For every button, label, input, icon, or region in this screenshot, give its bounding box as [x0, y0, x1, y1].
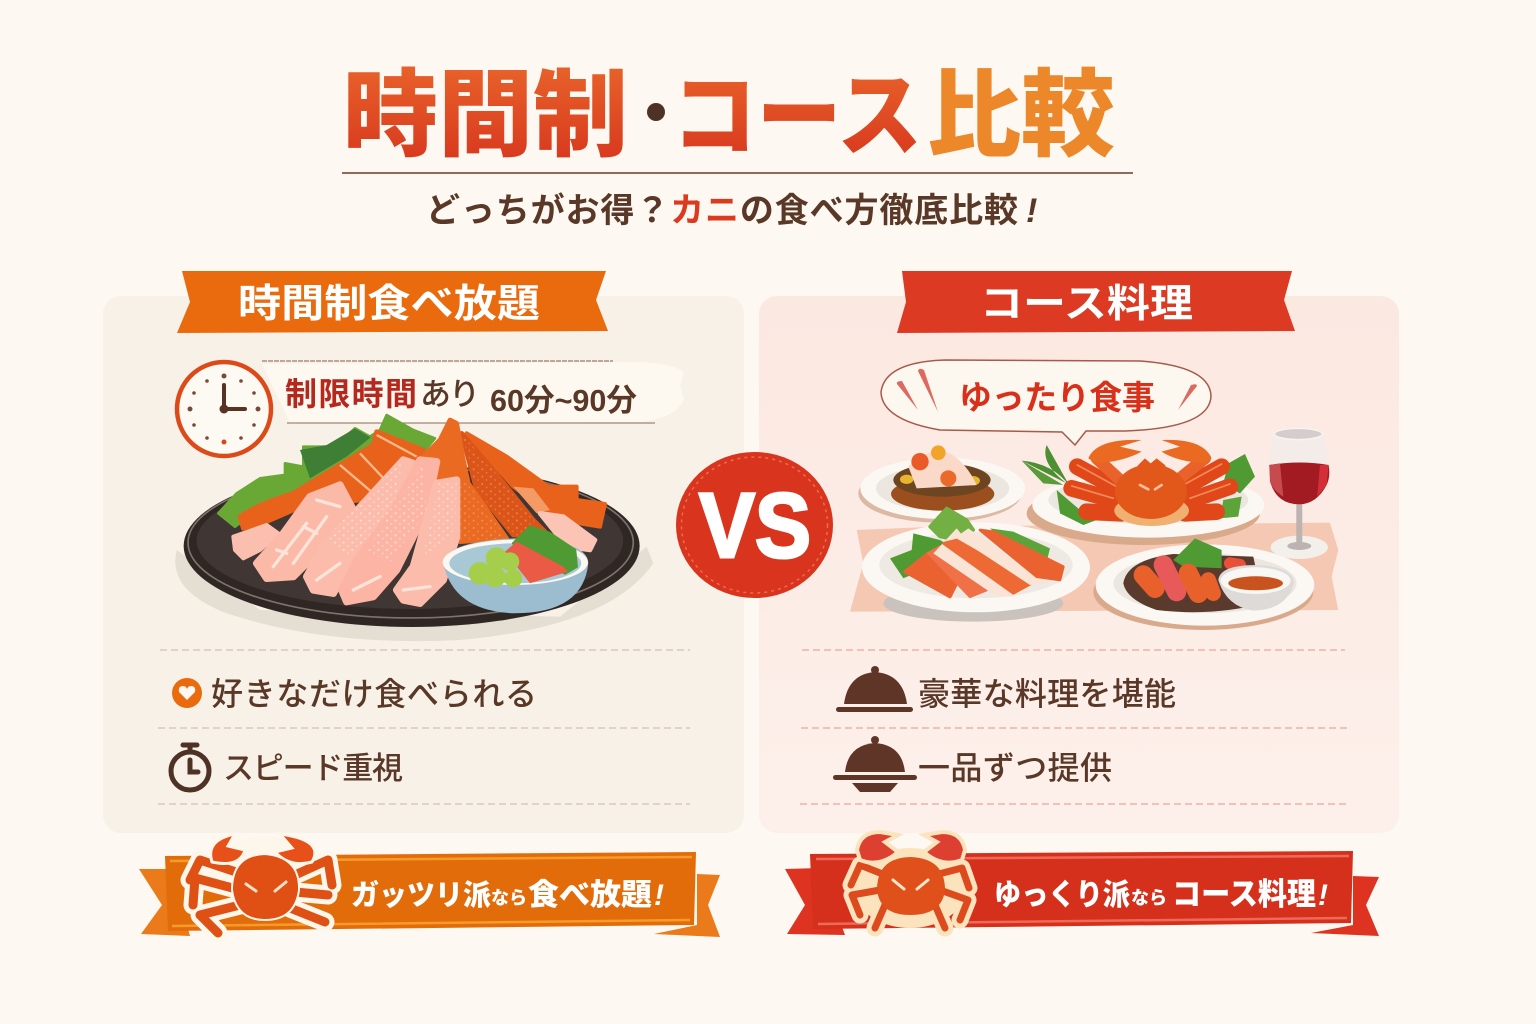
banner: course conclusion [785, 832, 1379, 936]
banner: buffet conclusion [139, 834, 720, 937]
icon: clock [177, 362, 271, 456]
icon: stopwatch [171, 745, 209, 790]
plate: whole crab [1022, 440, 1264, 545]
plate: crab steak with sauce [1093, 538, 1314, 630]
panel: course meal [759, 271, 1399, 833]
text: buffet for big eaters: ! [654, 879, 664, 912]
subtitle: どっちがお得？カニの食べ方徹底比較 [426, 191, 1018, 230]
callout: time limit: 60分~90分 [490, 383, 637, 418]
speech bubble: leisurely meal: ゆったり食事 [959, 379, 1155, 416]
text: course for leisurely eaters: ゆっくり派 [994, 879, 1130, 912]
text: enjoy luxurious dishes: 豪華な料理を堪能 [918, 676, 1176, 712]
text: buffet for big eaters [351, 879, 664, 912]
panel: time-limited buffet [103, 271, 744, 833]
title [343, 63, 1115, 169]
VS badge [676, 452, 833, 598]
text: served one by one: 一品ずつ提供 [918, 750, 1112, 786]
icon: heart [172, 678, 202, 708]
table runner [850, 523, 1338, 612]
title: 時間制 [343, 63, 628, 169]
header ribbon: course: コース料理 [980, 283, 1193, 326]
illustration: course dishes [850, 428, 1338, 630]
icon: cloche [836, 666, 913, 712]
header ribbon: buffet: 時間制食べ放題 [238, 283, 540, 326]
text: course for leisurely eaters: なら [1131, 888, 1167, 908]
text: eat as much as you like: 好きなだけ食べられる [211, 676, 537, 712]
callout: time limit: あり [420, 377, 480, 412]
text: course for leisurely eaters: コース料理 [1172, 877, 1316, 912]
VS badge: VS [699, 475, 811, 577]
wine glass [1269, 428, 1329, 559]
title: コース [672, 66, 922, 168]
text: buffet for big eaters: ガッツリ派 [351, 879, 491, 912]
icon: crab sticker [851, 832, 969, 928]
illustration: crab legs platter [175, 415, 653, 641]
divider and list: buffet points [158, 650, 690, 804]
callout: time limit [262, 361, 684, 423]
icon: serving dish [833, 736, 917, 792]
plate: crab sashimi [862, 508, 1090, 622]
header ribbon: buffet [177, 271, 608, 333]
subtitle: ! [1026, 192, 1037, 230]
text: buffet for big eaters: 食べ放題 [528, 879, 652, 912]
callout: time limit: 制限時間 [285, 376, 417, 412]
text: course for leisurely eaters [994, 877, 1328, 912]
text: speed focus: スピード重視 [223, 751, 403, 786]
speech bubble: leisurely meal [881, 360, 1211, 445]
header ribbon: course [897, 271, 1295, 333]
list: course points [800, 650, 1347, 804]
title: 比較 [927, 63, 1115, 169]
plate: gratin [858, 445, 1025, 523]
icon: crab sticker [190, 834, 332, 933]
text: course for leisurely eaters: ! [1318, 879, 1328, 912]
text: buffet for big eaters: なら [491, 888, 527, 908]
